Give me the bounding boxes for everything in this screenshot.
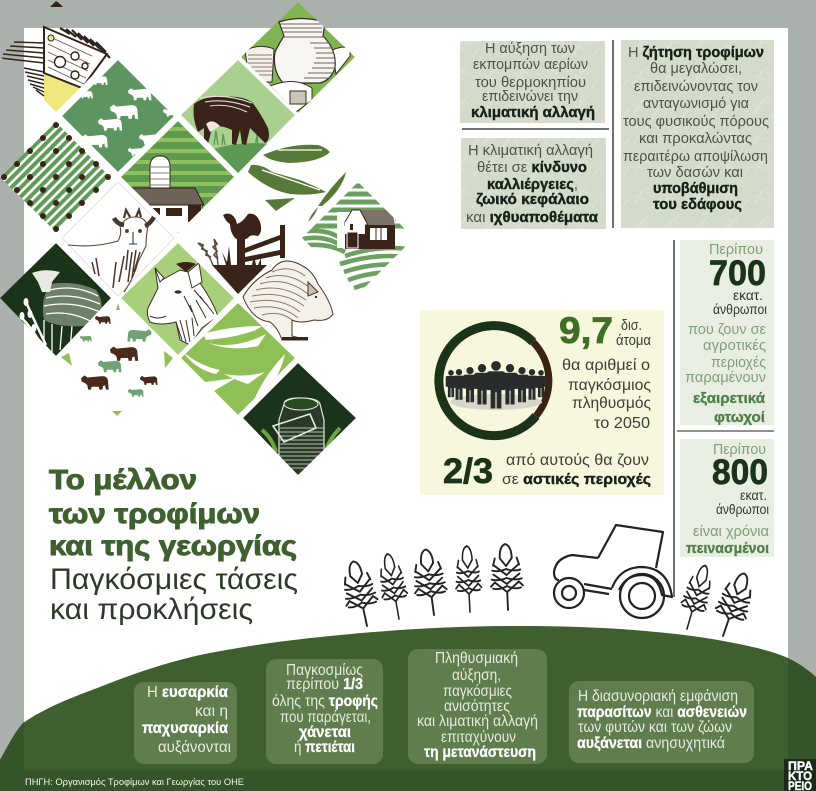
callout: obesity [134, 682, 237, 764]
icon: pig sketch [243, 261, 333, 340]
icon: cheese diamond [0, 1, 110, 112]
icon: milk can diamond [243, 363, 356, 475]
panel: 700 million poor: εξαιρετικά [693, 390, 766, 407]
icon: barn diamond [121, 121, 234, 233]
callout: migration: επιταχύνουν [441, 729, 516, 746]
panel: food demand: ανταγωνισμό για [643, 95, 749, 112]
panel: food demand: επιδεινώνοντας τον [634, 78, 758, 95]
icon: white cows on green diamond [62, 60, 179, 172]
callout: food waste: όλης της τροφής [272, 693, 378, 710]
text: world population: παγκόσμιος [568, 377, 651, 394]
panel: climate risks: Η κλιματική αλλαγή [468, 142, 593, 159]
text: world population: πληθυσμός [572, 395, 651, 412]
logo: ΠΡΑ [788, 761, 813, 773]
panel: climate gases: Η αύξηση των [485, 40, 575, 57]
panel: 700 million poor: 700 [709, 254, 766, 293]
stat: 9,7 billion [559, 310, 651, 351]
panel: climate gases: κλιματική αλλαγή [471, 104, 595, 121]
panel: 700 million poor: που ζουν σε [688, 321, 766, 338]
callout: obesity: και η [195, 703, 228, 720]
stat: two thirds urban: 2/3 [443, 452, 493, 491]
text: world population: το 2050 [594, 415, 650, 432]
icon: tractor [554, 525, 672, 618]
callout: migration: Πληθυσμιακή [435, 650, 518, 667]
panel: 700 million poor: περιοχές [711, 354, 766, 371]
callout: food waste: που παράγεται, [280, 709, 371, 726]
panel: population 2050 [420, 310, 664, 495]
callout: food waste: χάνεται [299, 724, 351, 741]
panel: food demand: Η ζήτηση τροφίμων [628, 44, 764, 61]
panel: climate gases: επιδεινώνει την [482, 88, 578, 105]
callout: pests and diseases [569, 681, 754, 763]
panel: 800 million hungry: εκατ. [740, 487, 767, 503]
icon: jug diamond [241, 2, 355, 113]
text: world population: θα αριθμεί ο [562, 357, 650, 374]
panel: green hill [0, 620, 816, 791]
callout: food waste: Παγκοσμίως [286, 662, 363, 679]
panel: food demand: περαιτέρω αποψίλωση [623, 148, 768, 165]
icon: wheat stalks [338, 543, 760, 641]
subtitle [50, 563, 298, 626]
callout: obesity: Η ευσαρκία [147, 684, 228, 701]
callout: migration: αύξηση, [452, 667, 501, 684]
heading: title: Το μέλλον [49, 464, 197, 495]
callout: pests and diseases: Η διασυνοριακή εμφάνιση [578, 688, 738, 705]
panel: climate risks [461, 138, 606, 229]
panel: 800 million hungry: 800 [712, 453, 768, 492]
icon: farmhouse diamond [302, 184, 406, 290]
logo: ΚΤΟ [788, 771, 812, 783]
icon: white leaves on green diamond [181, 303, 295, 415]
panel: climate gases: του θερμοκηπίου [475, 74, 586, 91]
panel: 700 million poor: παραμένουν [685, 369, 766, 386]
icon: rooster and fence [198, 214, 285, 294]
text: world population [562, 357, 651, 432]
panel: 700 million poor: Περίπου [709, 241, 763, 258]
icon: grazing cow diamond [181, 60, 295, 175]
source note: ΠΗΓΗ: Οργανισμός Τροφίμων και Γεωργίας του ΟΗΕ [25, 777, 244, 787]
panel: 800 million hungry: Περίπου [713, 441, 766, 458]
stat: two thirds urban [443, 452, 651, 491]
heading: title: και της γεωργίας [49, 530, 297, 561]
panel: climate gases [460, 40, 605, 123]
callout: food waste: ή πετιέται [294, 739, 355, 756]
panel: food demand [621, 40, 774, 228]
stat: 9,7 billion: δισ. [621, 317, 642, 334]
panel: climate risks: θέτει σε κίνδυνο [477, 159, 587, 176]
panel: climate risks: ζωικό κεφάλαιο [476, 191, 589, 208]
panel: 700 million poor: αγροτικές [703, 337, 766, 354]
callout: migration: τη μετανάστευση [424, 744, 536, 761]
panel: 800 million hungry: άνθρωποι [716, 501, 769, 517]
callout: obesity: αυξάνονται [158, 739, 231, 756]
panel: food demand: και προκαλώντας [639, 130, 752, 147]
callout: pests and diseases: παρασίτων και ασθενειών [577, 704, 747, 721]
icon: people in ring [439, 326, 549, 436]
icon: dots and stripes diamond [0, 122, 111, 232]
logo [784, 759, 816, 791]
panel: food demand: του εδάφους [653, 196, 742, 213]
callout: obesity: παχυσαρκία [142, 720, 228, 737]
panel: 800 million hungry: είναι χρόνια [693, 523, 769, 540]
stat: two thirds urban: από αυτούς θα ζουν [506, 452, 649, 469]
callout: pests and diseases: των φυτών και των ζώων [578, 719, 732, 736]
panel: 700 million poor: εκατ. [733, 287, 763, 303]
stat: 9,7 billion: 9,7 [559, 310, 613, 351]
panel: 700 million poor: φτωχοί [714, 409, 765, 426]
callout: pests and diseases: αυξάνεται ανησυχητικά [577, 735, 725, 752]
callout: migration: και λιματική αλλαγή [417, 713, 538, 730]
heading: title [49, 464, 298, 626]
panel: climate gases: εκπομπών αερίων [473, 56, 588, 73]
icon: olive leaves [248, 145, 346, 222]
callout: migration: ανισότητες [444, 698, 510, 715]
subtitle: Παγκόσμιες τάσεις [50, 563, 298, 596]
callout: migration: παγκόσμιες [443, 683, 512, 700]
panel: food demand: θα μεγαλώσει, [650, 60, 742, 77]
callout: migration [408, 649, 547, 764]
callout: food waste: περίπου 1/3 [286, 676, 363, 693]
panel: climate risks: καλλιέργειες, [487, 176, 578, 193]
panel: 800 million hungry [680, 439, 774, 557]
panel: 700 million poor: άνθρωποι [713, 301, 767, 317]
panel: 800 million hungry: πεινασμένοι [686, 540, 769, 557]
subtitle: και προκλήσεις [50, 593, 253, 626]
icon: white goat sketch [62, 182, 174, 296]
panel: 700 million poor [680, 240, 774, 426]
icon: small cows [61, 303, 173, 416]
stat: two thirds urban: σε αστικές περιοχές [502, 471, 651, 488]
icon: dark sheep diamond [0, 243, 111, 356]
heading: title: των τροφίμων [49, 498, 260, 529]
panel: food demand: τους φυσικούς πόρους [623, 113, 769, 130]
panel: climate risks: και ιχθυαποθέματα [466, 209, 599, 226]
panel: food demand: υποβάθμιση [653, 180, 738, 197]
stat: 9,7 billion: άτομα [616, 332, 651, 349]
callout: food waste [266, 659, 383, 764]
panel: food demand: των δασών και [647, 164, 743, 181]
icon: goat head on light green diamond [121, 243, 234, 355]
